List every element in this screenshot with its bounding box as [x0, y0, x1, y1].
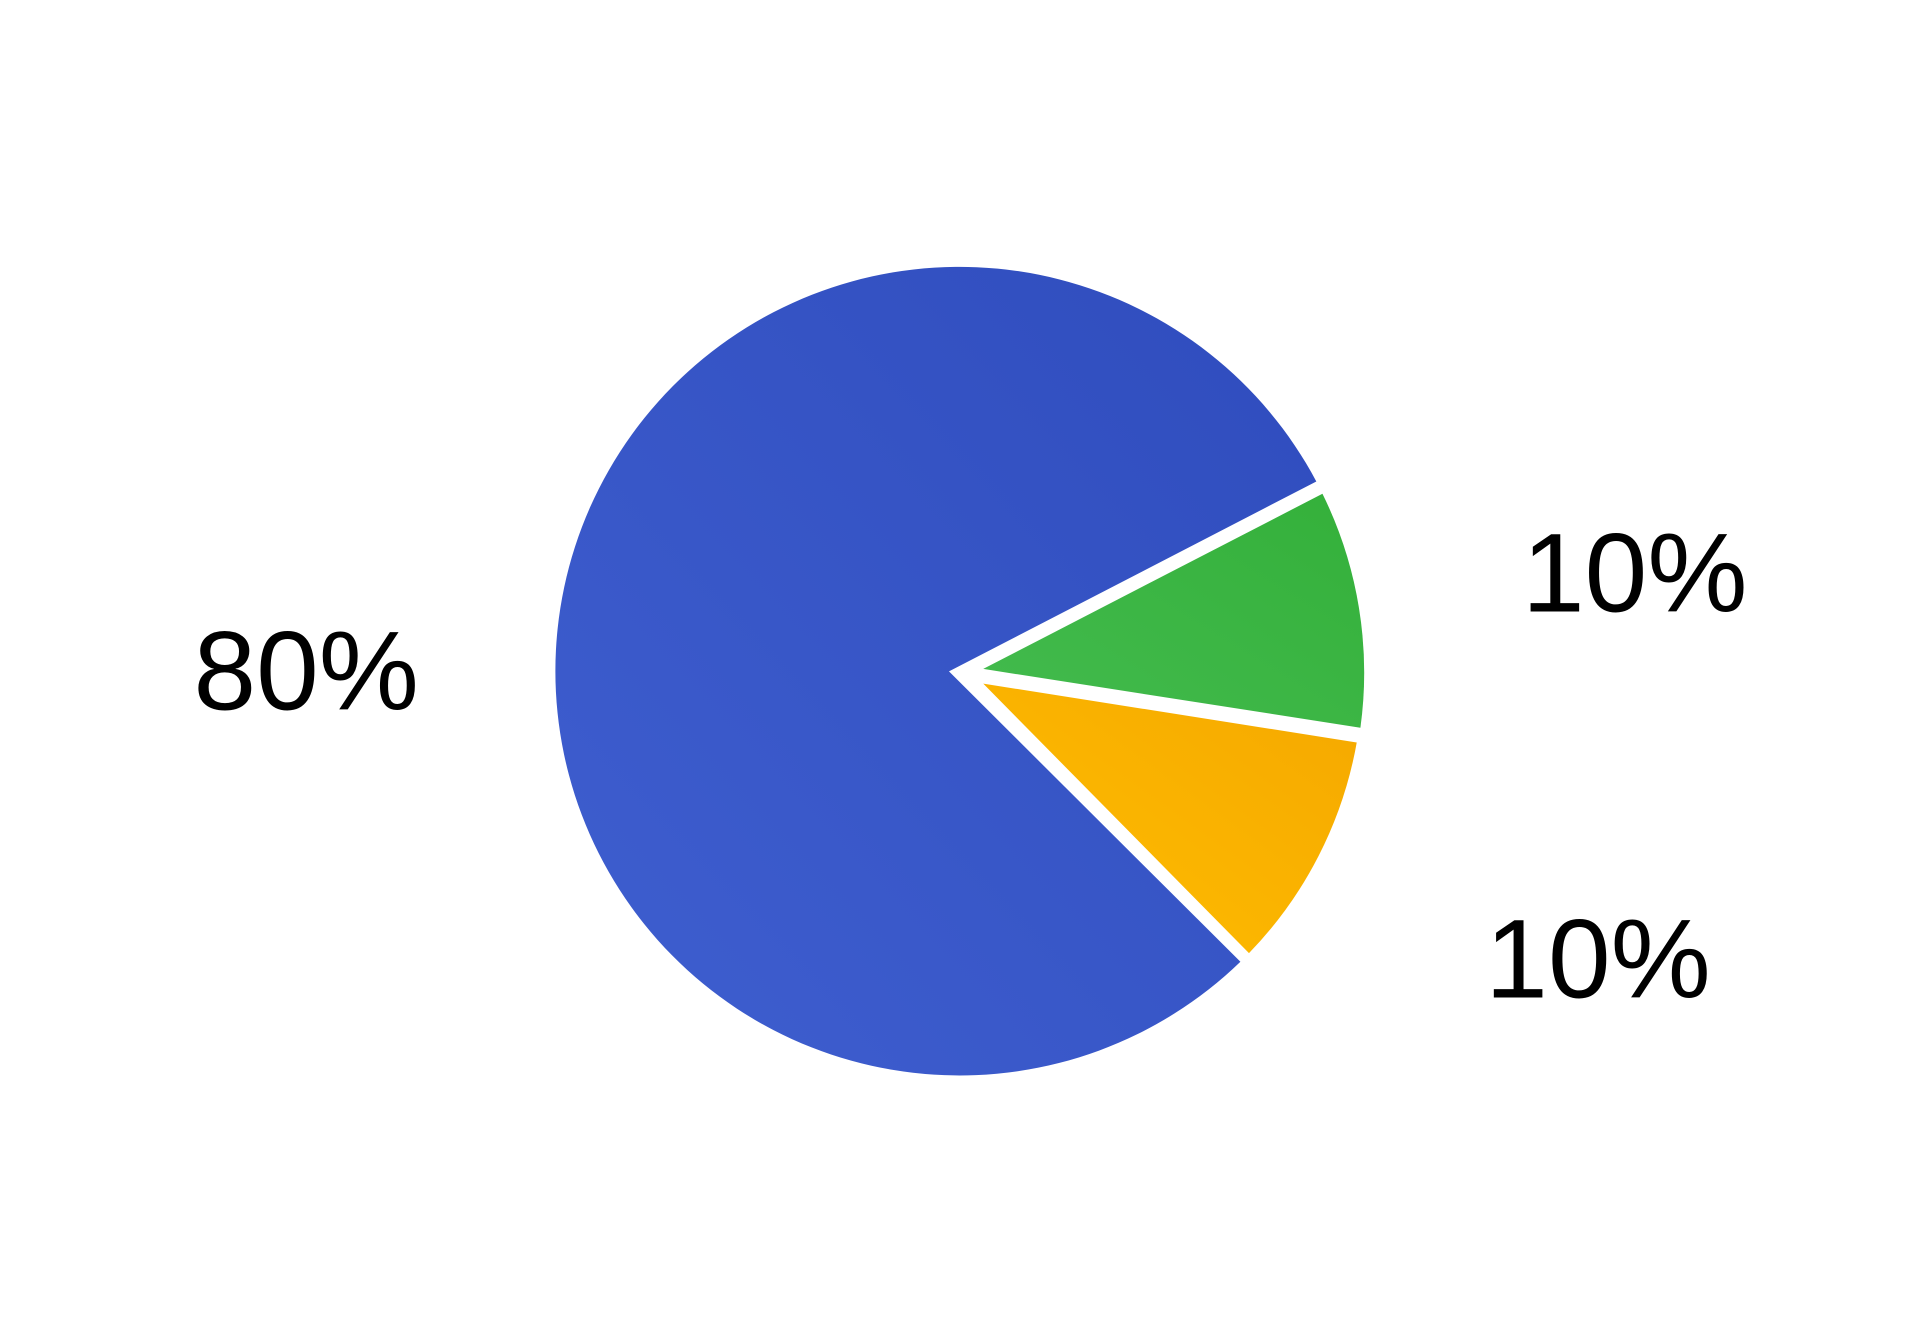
- label: 10% yellow: 10%: [1485, 895, 1711, 1021]
- slice: blue 80%: [555, 267, 1316, 1075]
- slice: yellow 10%: [983, 684, 1357, 953]
- label: 80%: 80%: [193, 607, 419, 733]
- slice: green 10%: [983, 494, 1364, 728]
- label: 10% green: 10%: [1522, 509, 1747, 635]
